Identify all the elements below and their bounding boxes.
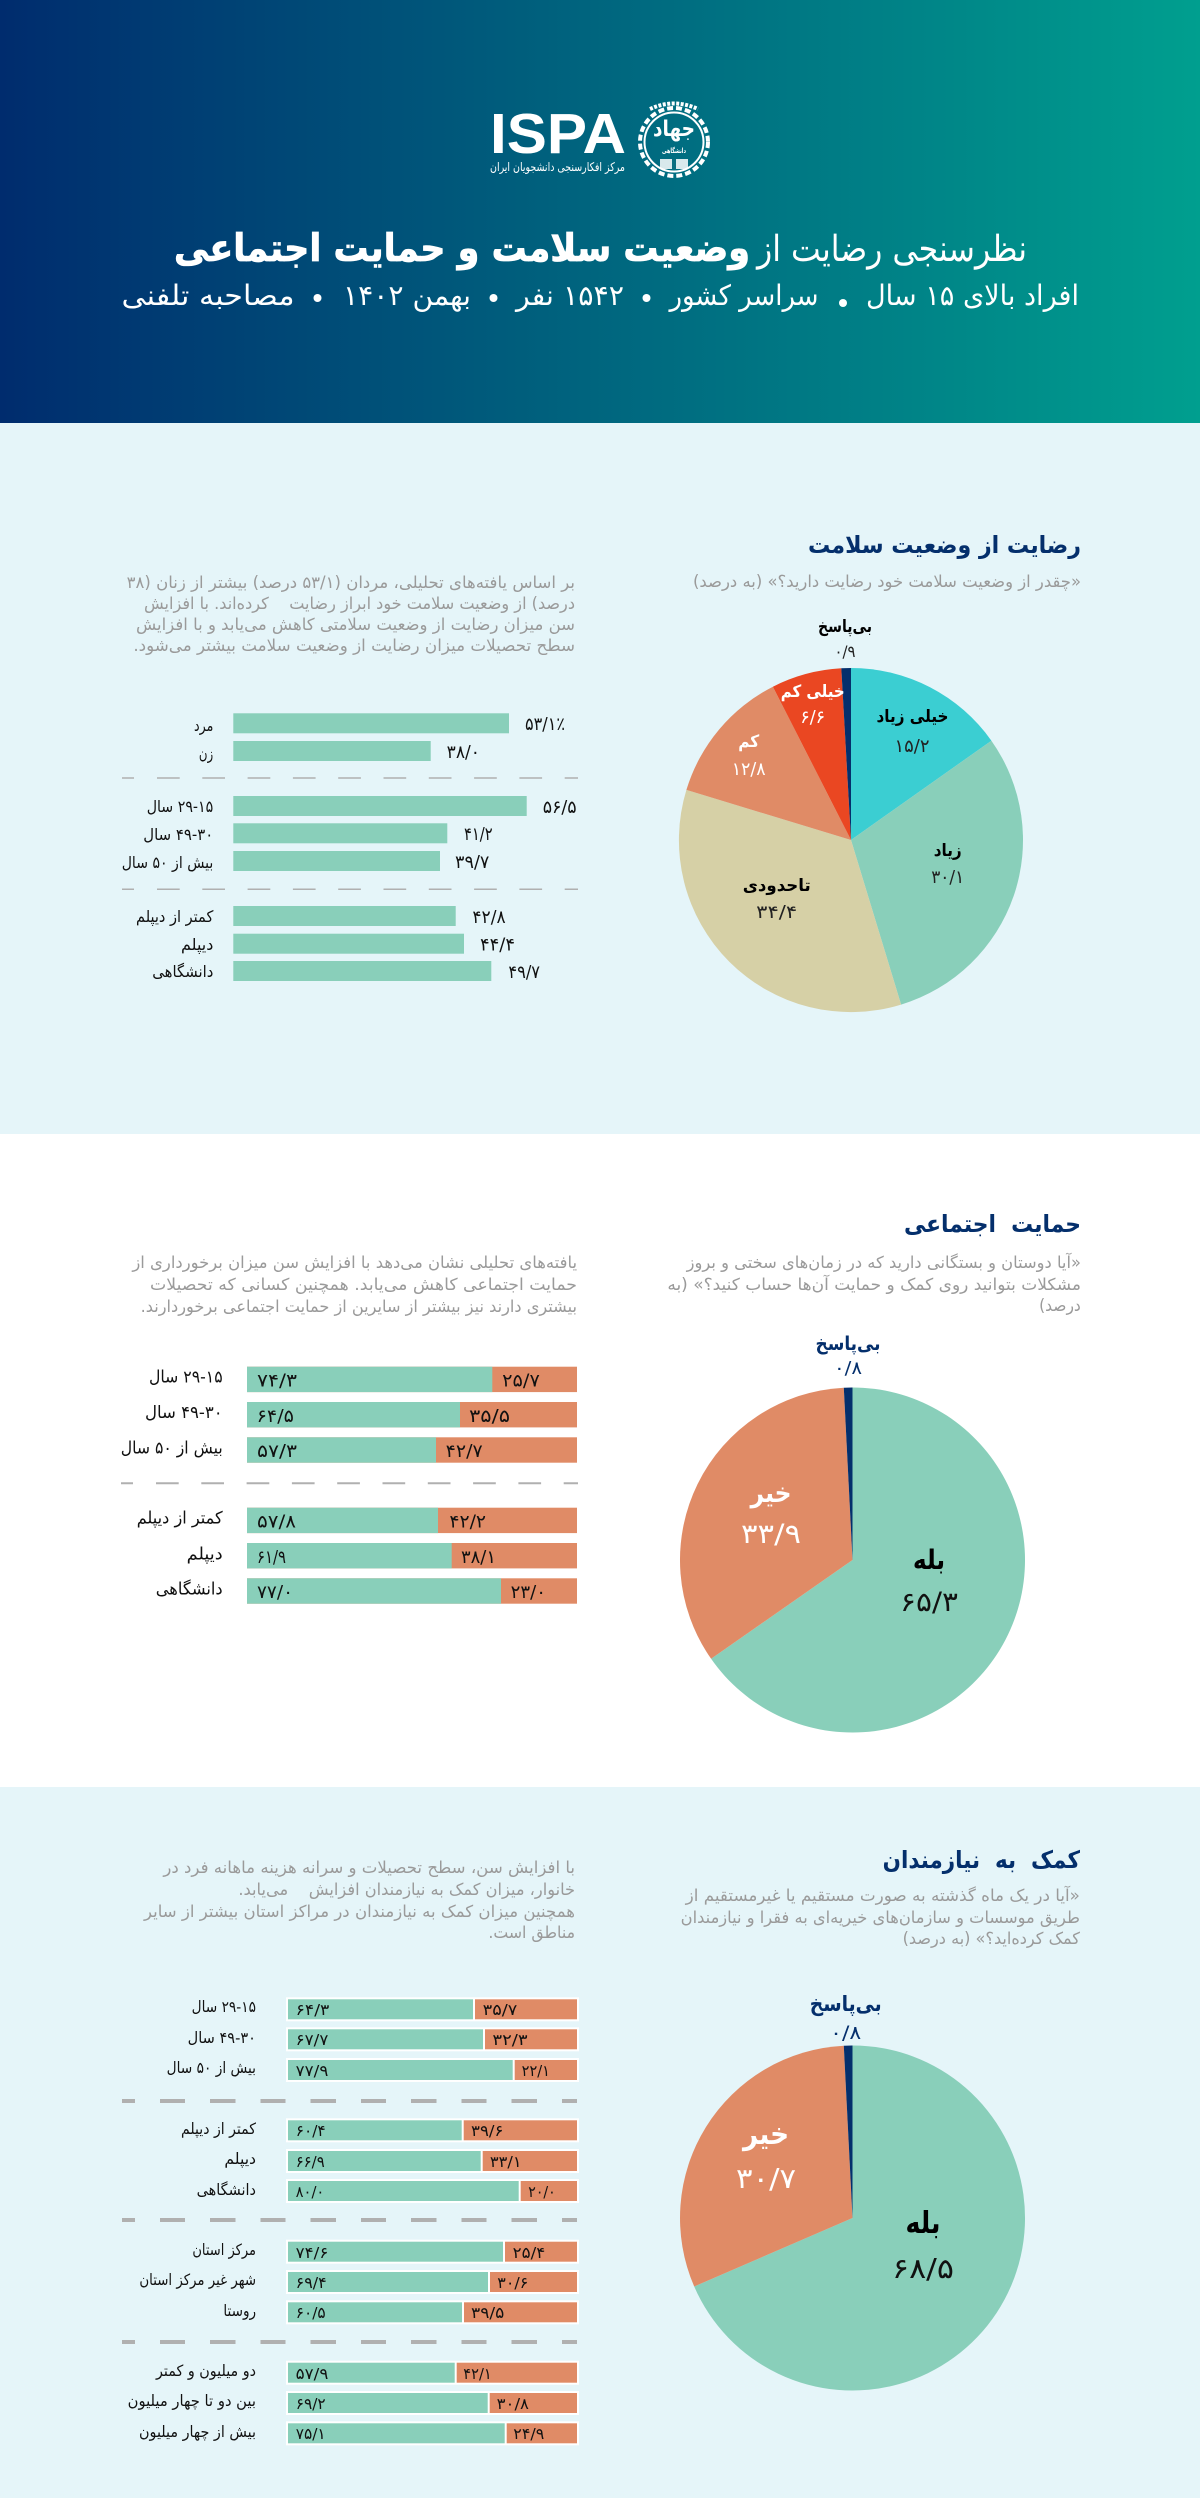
pie chart: social support: ۰/۸ bbox=[834, 1358, 862, 1379]
pie chart: helping the needy bbox=[680, 1992, 1025, 2391]
stacked bar chart: helping by group: دانشگاهی bbox=[197, 2181, 256, 2199]
stacked bar chart: helping by group: ۶۹/۴ bbox=[296, 2274, 327, 2292]
bar chart: health satisfaction by group: ۴۹-۳۰ سال bbox=[143, 825, 213, 844]
bar chart: health satisfaction by group: مرد bbox=[194, 716, 213, 736]
stacked bar chart: social support by group bbox=[121, 1367, 578, 1604]
pie chart: health satisfaction: ۶/۶ bbox=[800, 707, 825, 728]
question text: «آیا دوستان و بستگانی دارید که در زمان‌های سختی و بروز bbox=[686, 1253, 1081, 1273]
stacked bar chart: helping by group: ۴۹-۳۰ سال bbox=[188, 2029, 256, 2047]
pie chart: health satisfaction: ۳۰/۱ bbox=[931, 867, 964, 888]
title: نظرسنجی رضایت از bbox=[755, 229, 1027, 270]
pie chart: health satisfaction: ۰/۹ bbox=[834, 642, 856, 661]
stacked bar chart: social support by group: کمتر از دیپلم bbox=[137, 1508, 224, 1528]
stacked bar chart: helping by group: ۶۹/۲ bbox=[296, 2395, 326, 2413]
question text: طریق موسسات و سازمان‌های خیریه‌ای به فقرا و نیازمندان bbox=[681, 1908, 1080, 1928]
stacked bar chart: helping by group: ۶۴/۳ bbox=[296, 2001, 329, 2019]
stacked bar chart: helping by group: ۷۴/۶ bbox=[296, 2244, 328, 2262]
stacked bar chart: helping by group: ۶۰/۵ bbox=[296, 2304, 326, 2322]
stacked bar chart: helping by group: مرکز استان bbox=[192, 2241, 256, 2259]
subtitle: survey details: مصاحبه تلفنی bbox=[122, 279, 294, 312]
stacked bar chart: helping by group: ۲۵/۴ bbox=[513, 2244, 545, 2262]
pie chart: health satisfaction: خیلی کم bbox=[781, 682, 845, 702]
title: وضعیت سلامت و حمایت اجتماعی bbox=[174, 226, 750, 271]
bar chart: health satisfaction by group: دیپلم bbox=[181, 935, 213, 955]
bar chart: health satisfaction by group: ۵۳/۱٪ bbox=[525, 714, 565, 735]
stacked bar chart: helping by group bbox=[122, 1997, 579, 2445]
bar chart: health satisfaction by group: ۴۴/۴ bbox=[480, 934, 515, 956]
stacked bar chart: helping by group: ۲۴/۹ bbox=[513, 2425, 544, 2443]
pie chart: helping the needy: بی‌پاسخ bbox=[810, 1992, 882, 2016]
pie chart: health satisfaction: تاحدودی bbox=[743, 876, 811, 896]
pie chart: health satisfaction: خیلی زیاد bbox=[876, 707, 948, 727]
stacked bar chart: helping by group: بین دو تا چهار میلیون bbox=[128, 2392, 256, 2411]
stacked bar chart: helping by group: ۶۷/۷ bbox=[296, 2031, 328, 2049]
bar chart: health satisfaction by group: ۳۸/۰ bbox=[447, 742, 480, 763]
findings text bbox=[131, 1253, 577, 1317]
pie chart: social support: ۳۳/۹ bbox=[741, 1519, 801, 1550]
question text: «چقدر از وضعیت سلامت خود رضایت دارید؟» (به درصد) bbox=[693, 572, 1081, 592]
findings text: با افزایش سن، سطح تحصیلات و سرانه هزینه ماهانه فرد در bbox=[162, 1858, 575, 1878]
stacked bar chart: helping by group: روستا bbox=[223, 2302, 256, 2321]
pie chart: helping the needy: ۳۰/۷ bbox=[736, 2162, 796, 2195]
findings text bbox=[127, 573, 575, 656]
question text: درصد) bbox=[1039, 1296, 1081, 1316]
bar chart: health satisfaction by group: ۲۹-۱۵ سال bbox=[147, 797, 213, 816]
question text bbox=[681, 1886, 1080, 1949]
stacked bar chart: social support by group: ۲۳/۰ bbox=[511, 1582, 546, 1603]
stacked bar chart: helping by group: بیش از ۵۰ سال bbox=[167, 2059, 256, 2077]
findings text: بیشتری دارند نیز بیشتر از سایرین از حمایت اجتماعی برخوردارند. bbox=[141, 1297, 577, 1317]
stacked bar chart: helping by group: کمتر از دیپلم bbox=[181, 2120, 257, 2139]
bar chart: health satisfaction by group: کمتر از دیپلم bbox=[136, 907, 214, 927]
panel: helping the needy bbox=[0, 1787, 1200, 2498]
heading: social support: حمایت اجتماعی bbox=[904, 1210, 1081, 1238]
pie chart: helping the needy: بله bbox=[906, 2206, 940, 2241]
pie chart: helping the needy: ۰/۸ bbox=[830, 2022, 861, 2044]
findings text: مناطق است. bbox=[488, 1923, 575, 1942]
bar chart: health satisfaction by group: ۴۹/۷ bbox=[508, 962, 540, 983]
logo subtitle: مرکز افکارسنجی دانشجویان ایران bbox=[490, 160, 625, 175]
stacked bar chart: social support by group: ۴۹-۳۰ سال bbox=[145, 1403, 223, 1423]
findings text bbox=[143, 1858, 575, 1942]
bar chart: health satisfaction by group: ۴۱/۲ bbox=[464, 824, 493, 845]
bar chart: health satisfaction by group: ۳۹/۷ bbox=[455, 852, 490, 873]
stacked bar chart: helping by group: ۳۵/۷ bbox=[483, 2001, 517, 2019]
stacked bar chart: social support by group: ۲۵/۷ bbox=[502, 1370, 540, 1392]
stacked bar chart: helping by group: ۲۹-۱۵ سال bbox=[192, 1998, 256, 2016]
pie chart: helping the needy: خیر bbox=[741, 2117, 789, 2152]
pie chart: social support: ۶۵/۳ bbox=[900, 1587, 958, 1618]
stacked bar chart: helping by group: دو میلیون و کمتر bbox=[155, 2362, 256, 2381]
bar chart: health satisfaction by group: دانشگاهی bbox=[152, 962, 213, 981]
pie chart: health satisfaction: ۱۲/۸ bbox=[732, 759, 766, 780]
stacked bar chart: helping by group: دیپلم bbox=[224, 2150, 256, 2169]
pie chart: helping the needy: ۶۸/۵ bbox=[892, 2252, 954, 2285]
stacked bar chart: social support by group: ۷۷/۰ bbox=[257, 1582, 293, 1603]
pie chart: health satisfaction: بی‌پاسخ bbox=[818, 617, 872, 637]
subtitle: survey details: سراسر کشور bbox=[668, 279, 818, 312]
stacked bar chart: social support by group: ۶۱/۹ bbox=[257, 1547, 286, 1568]
stacked bar chart: social support by group: بیش از ۵۰ سال bbox=[121, 1438, 223, 1458]
findings text: یافته‌های تحلیلی نشان می‌دهد با افزایش سن میزان برخورداری از bbox=[131, 1253, 577, 1273]
stacked bar chart: helping by group: ۶۰/۴ bbox=[296, 2122, 326, 2140]
subtitle: survey details bbox=[122, 279, 1079, 312]
bar chart: health satisfaction by group: ۵۶/۵ bbox=[543, 797, 577, 818]
pie chart: social support bbox=[680, 1333, 1025, 1733]
question text: «آیا در یک ماه گذشته به صورت مستقیم یا غیرمستقیم از bbox=[685, 1886, 1080, 1906]
stacked bar chart: helping by group: ۴۲/۱ bbox=[463, 2365, 492, 2383]
pie chart: health satisfaction: کم bbox=[738, 732, 759, 752]
findings text: سطح تحصیلات میزان رضایت از وضعیت سلامت بیشتر می‌شود. bbox=[133, 636, 575, 656]
stacked bar chart: helping by group: ۳۲/۳ bbox=[492, 2031, 528, 2049]
panel: health satisfaction bbox=[0, 423, 1200, 1134]
stacked bar chart: helping by group: ۸۰/۰ bbox=[296, 2183, 324, 2201]
bar chart: health satisfaction by group: زن bbox=[199, 744, 213, 764]
stacked bar chart: helping by group: ۶۶/۹ bbox=[296, 2153, 325, 2171]
pie chart: health satisfaction bbox=[679, 617, 1023, 1012]
stacked bar chart: social support by group: ۷۴/۳ bbox=[257, 1370, 297, 1392]
findings text: بر اساس یافته‌های تحلیلی، مردان (۵۳/۱ درصد) بیشتر از زنان (۳۸ bbox=[127, 573, 575, 593]
stacked bar chart: helping by group: ۷۵/۱ bbox=[296, 2425, 326, 2443]
findings text: همچنین میزان کمک به نیازمندان در مراکز استان بیشتر از سایر bbox=[143, 1902, 575, 1922]
question text: کمک کرده‌اید؟» (به درصد) bbox=[903, 1929, 1080, 1949]
findings text: حمایت اجتماعی کاهش می‌یابد. همچنین کسانی که تحصیلات bbox=[150, 1275, 577, 1294]
stacked bar chart: social support by group: ۴۲/۲ bbox=[449, 1512, 486, 1532]
stacked bar chart: social support by group: ۴۲/۷ bbox=[446, 1441, 483, 1462]
stacked bar chart: helping by group: ۳۹/۶ bbox=[471, 2122, 503, 2140]
stacked bar chart: social support by group: ۶۴/۵ bbox=[257, 1406, 294, 1427]
stacked bar chart: helping by group: ۳۳/۱ bbox=[490, 2153, 522, 2171]
icon: Jahad emblem: جهاد bbox=[653, 117, 695, 142]
findings text: درصد) از وضعیت سلامت خود ابراز رضایت کرده‌اند. با افزایش bbox=[144, 594, 575, 614]
stacked bar chart: helping by group: ۳۰/۶ bbox=[497, 2274, 528, 2292]
stacked bar chart: helping by group: شهر غیر مرکز استان bbox=[139, 2271, 256, 2290]
pie chart: health satisfaction: ۱۵/۲ bbox=[894, 736, 930, 757]
bar chart: health satisfaction by group bbox=[122, 713, 578, 983]
stacked bar chart: social support by group: ۵۷/۳ bbox=[257, 1441, 297, 1462]
stacked bar chart: social support by group: ۳۵/۵ bbox=[469, 1406, 510, 1427]
findings text: سن میزان رضایت از وضعیت سلامتی کاهش می‌یابد و با افزایش bbox=[136, 615, 575, 635]
stacked bar chart: helping by group: ۷۷/۹ bbox=[296, 2062, 328, 2080]
findings text: خانوار، میزان کمک به نیازمندان افزایش می‌یابد. bbox=[238, 1880, 575, 1900]
heading: health satisfaction: رضایت از وضعیت سلامت bbox=[808, 531, 1081, 559]
stacked bar chart: social support by group: ۳۸/۱ bbox=[461, 1547, 496, 1568]
pie chart: social support: خیر bbox=[749, 1478, 792, 1509]
panel: header banner bbox=[0, 0, 1200, 423]
stacked bar chart: social support by group: ۵۷/۸ bbox=[257, 1512, 296, 1532]
logo: ISPA wordmark: ISPA bbox=[490, 102, 626, 166]
stacked bar chart: helping by group: ۲۰/۰ bbox=[528, 2183, 556, 2201]
stacked bar chart: helping by group: ۳۹/۵ bbox=[471, 2304, 504, 2322]
panel: social support bbox=[0, 1134, 1200, 1787]
subtitle: survey details: افراد بالای ۱۵ سال bbox=[866, 279, 1079, 312]
pie chart: health satisfaction: ۳۴/۴ bbox=[756, 902, 797, 923]
bar chart: health satisfaction by group: بیش از ۵۰ سال bbox=[122, 853, 213, 873]
bar chart: health satisfaction by group: ۴۲/۸ bbox=[472, 907, 506, 928]
pie chart: social support: بی‌پاسخ bbox=[816, 1333, 880, 1355]
stacked bar chart: social support by group: دیپلم bbox=[187, 1544, 223, 1564]
question text: مشکلات بتوانید روی کمک و حمایت آن‌ها حساب کنید؟» (به bbox=[667, 1275, 1081, 1295]
icon: Jahad emblem bbox=[640, 104, 708, 176]
subtitle: survey details: ۱۵۴۲ نفر bbox=[514, 279, 624, 312]
stacked bar chart: helping by group: بیش از چهار میلیون bbox=[139, 2423, 256, 2442]
subtitle: survey details: بهمن ۱۴۰۲ bbox=[343, 279, 471, 312]
stacked bar chart: helping by group: ۵۷/۹ bbox=[296, 2365, 328, 2383]
pie chart: social support: بله bbox=[913, 1545, 945, 1576]
stacked bar chart: helping by group: ۳۰/۸ bbox=[497, 2395, 529, 2413]
question text bbox=[667, 1253, 1081, 1316]
stacked bar chart: helping by group: ۲۲/۱ bbox=[522, 2062, 550, 2080]
stacked bar chart: social support by group: ۲۹-۱۵ سال bbox=[149, 1368, 223, 1388]
heading: helping the needy: کمک به نیازمندان bbox=[883, 1846, 1080, 1874]
icon: Jahad emblem: دانشگاهی bbox=[662, 146, 686, 155]
stacked bar chart: social support by group: دانشگاهی bbox=[156, 1578, 223, 1600]
pie chart: health satisfaction: زیاد bbox=[934, 841, 962, 861]
